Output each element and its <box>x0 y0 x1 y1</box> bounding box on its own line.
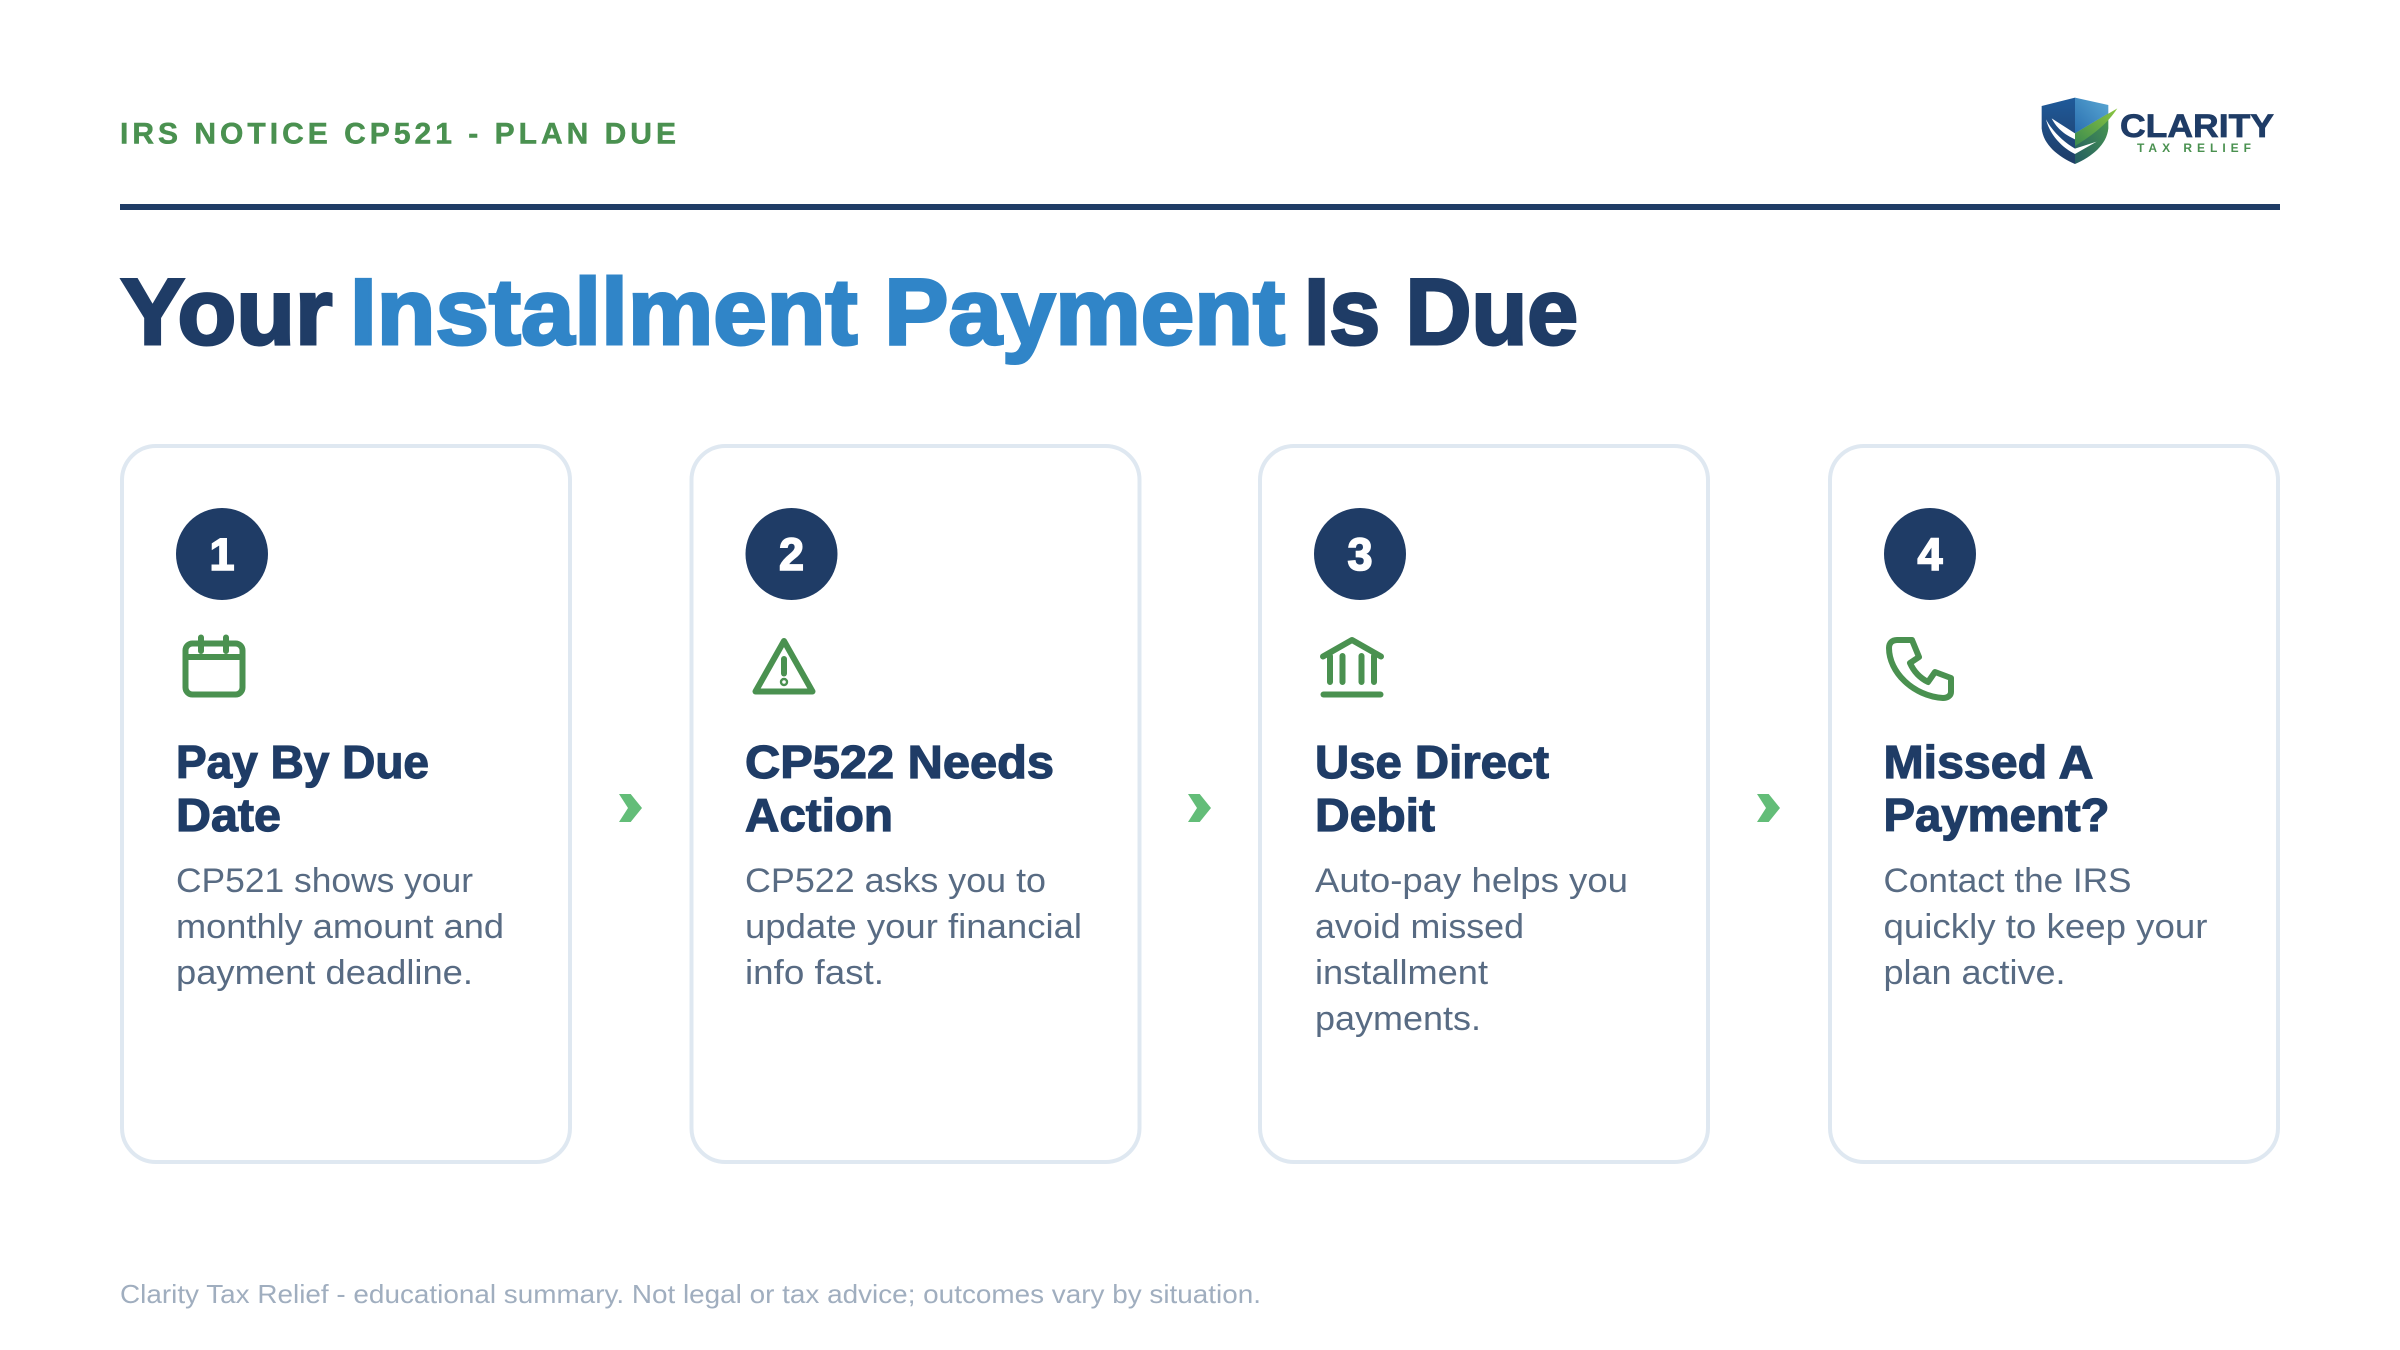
title <box>120 259 1578 364</box>
arrow: step 3 to 4 <box>1757 794 1780 822</box>
body text: step 3: installment <box>1315 954 1488 992</box>
arrow: step 2 to 3 <box>1188 794 1211 822</box>
eyebrow label: IRS NOTICE CP521 - PLAN DUE <box>120 118 676 150</box>
panel: step 3 <box>1260 446 1708 1162</box>
logo tagline: TAX RELIEF <box>2137 141 2251 155</box>
icon: warning triangle <box>756 641 812 692</box>
header rule <box>120 204 2280 210</box>
footer disclaimer: Clarity Tax Relief - educational summary. Not legal or tax advice; outcomes vary by situation. <box>120 1279 1261 1309</box>
icon: phone <box>1889 640 1951 698</box>
panel: step 2 <box>692 446 1140 1162</box>
body text: step 4 <box>1884 862 2208 992</box>
body text: step 4: quickly to keep your <box>1884 908 2208 946</box>
body text: step 2: update your financial <box>745 908 1082 946</box>
heading: cp522 needs action <box>745 736 1054 841</box>
body text: step 2: info fast. <box>745 954 884 992</box>
logo shield icon <box>2042 98 2117 164</box>
body text: step 4: plan active. <box>1884 954 2066 992</box>
body text: step 1: CP521 shows your <box>176 862 473 900</box>
title: Your <box>120 259 332 364</box>
heading: pay by due date: Date <box>176 789 281 841</box>
step number 3 <box>1314 508 1406 600</box>
heading: use direct debit <box>1315 736 1549 841</box>
heading: use direct debit: Debit <box>1315 789 1435 841</box>
body text: step 3: payments. <box>1315 1000 1481 1038</box>
panel: step 4 <box>1830 446 2278 1162</box>
heading: cp522 needs action: Action <box>745 789 893 841</box>
icon: calendar <box>186 638 242 694</box>
step number 1: 1 <box>209 529 235 580</box>
heading: use direct debit: Use Direct <box>1315 736 1549 788</box>
logo wordmark: CLARITY <box>2120 108 2274 144</box>
logo: Clarity Tax Relief <box>2042 98 2274 164</box>
step number 1 <box>176 508 268 600</box>
icon: bank <box>1323 640 1381 694</box>
body text: step 4: Contact the IRS <box>1884 862 2132 900</box>
body text: step 3: Auto-pay helps you <box>1315 862 1628 900</box>
body text: step 1 <box>176 862 504 992</box>
panel: step 1 <box>122 446 570 1162</box>
body text: step 2 <box>745 862 1082 992</box>
body text: step 3: avoid missed <box>1315 908 1524 946</box>
title: Installment Payment <box>350 259 1285 364</box>
body text: step 3 <box>1315 862 1628 1038</box>
heading: pay by due date: Pay By Due <box>176 736 429 788</box>
step number 3: 3 <box>1347 529 1373 580</box>
step number 4 <box>1884 508 1976 600</box>
title: Is Due <box>1304 259 1578 364</box>
body text: step 1: monthly amount and <box>176 908 504 946</box>
body text: step 2: CP522 asks you to <box>745 862 1046 900</box>
heading: missed a payment <box>1884 736 2110 841</box>
heading: missed a payment: Missed A <box>1884 736 2094 788</box>
heading: cp522 needs action: CP522 Needs <box>745 736 1054 788</box>
step number 4: 4 <box>1917 529 1943 580</box>
step number 2: 2 <box>779 529 804 580</box>
arrow: step 1 to 2 <box>619 794 642 822</box>
heading: pay by due date <box>176 736 429 841</box>
heading: missed a payment: Payment? <box>1884 789 2110 841</box>
step number 2 <box>746 508 838 600</box>
body text: step 1: payment deadline. <box>176 954 473 992</box>
